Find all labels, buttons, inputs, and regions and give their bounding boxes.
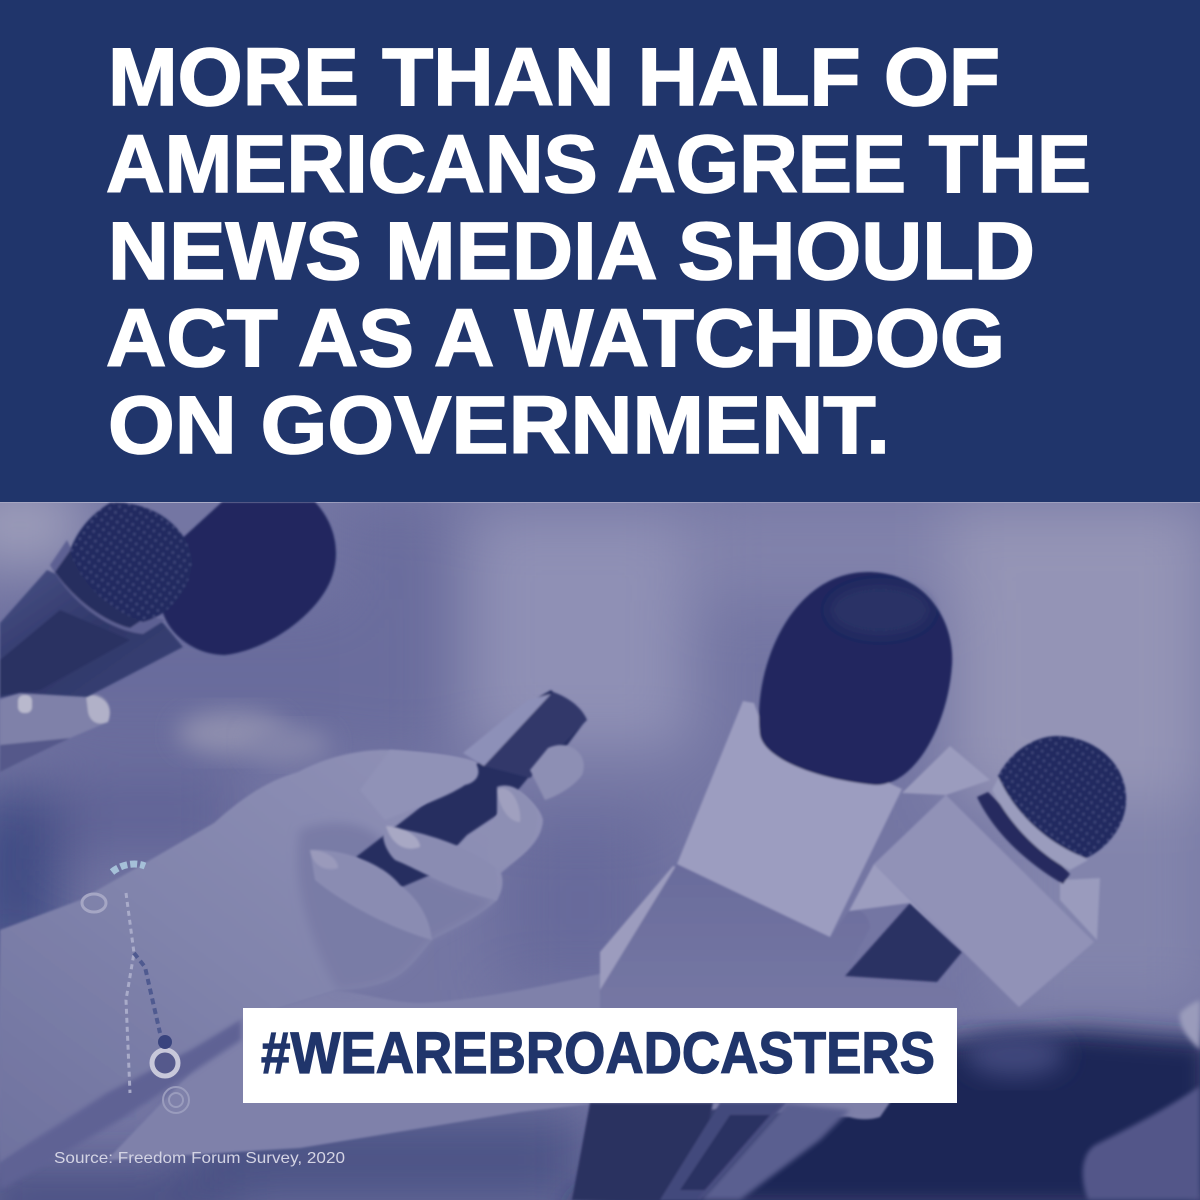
panel: duotone microphone photo	[0, 490, 1200, 1200]
icon: top-left microphones	[0, 502, 336, 698]
title: NEWS MEDIA SHOULD	[108, 206, 1035, 297]
hashtag banner	[243, 1008, 957, 1103]
icon: fingers over phone	[310, 745, 584, 940]
icon: small microphone with cube	[849, 736, 1126, 1007]
source note: Source: Freedom Forum Survey, 2020	[54, 1150, 345, 1167]
icon: small microphone handle	[845, 903, 962, 982]
title: ON GOVERNMENT.	[108, 380, 890, 471]
panel: header background	[0, 0, 1200, 501]
hashtag banner: #WEAREBROADCASTERS	[261, 1021, 935, 1086]
background blob	[177, 711, 287, 755]
icon: second forearm	[108, 974, 600, 1160]
icon: left hand and arm	[0, 750, 543, 1190]
icon: lower microphone handles	[572, 1103, 850, 1200]
dark lower-right background	[560, 1030, 1200, 1200]
icon: foreground hand at right edge	[1083, 1000, 1200, 1200]
icon: bracelet	[82, 864, 189, 1113]
title: MORE THAN HALF OF	[108, 32, 1000, 123]
title: AMERICANS AGREE THE	[106, 119, 1091, 210]
icon: upper-left fingers	[0, 692, 110, 772]
title: ACT AS A WATCHDOG	[106, 293, 1005, 384]
title	[106, 32, 1091, 471]
icon: mic-holding hand and handle	[599, 866, 891, 1120]
icon: phone recorder	[356, 690, 587, 890]
icon: large foam microphone with cube	[677, 572, 952, 937]
